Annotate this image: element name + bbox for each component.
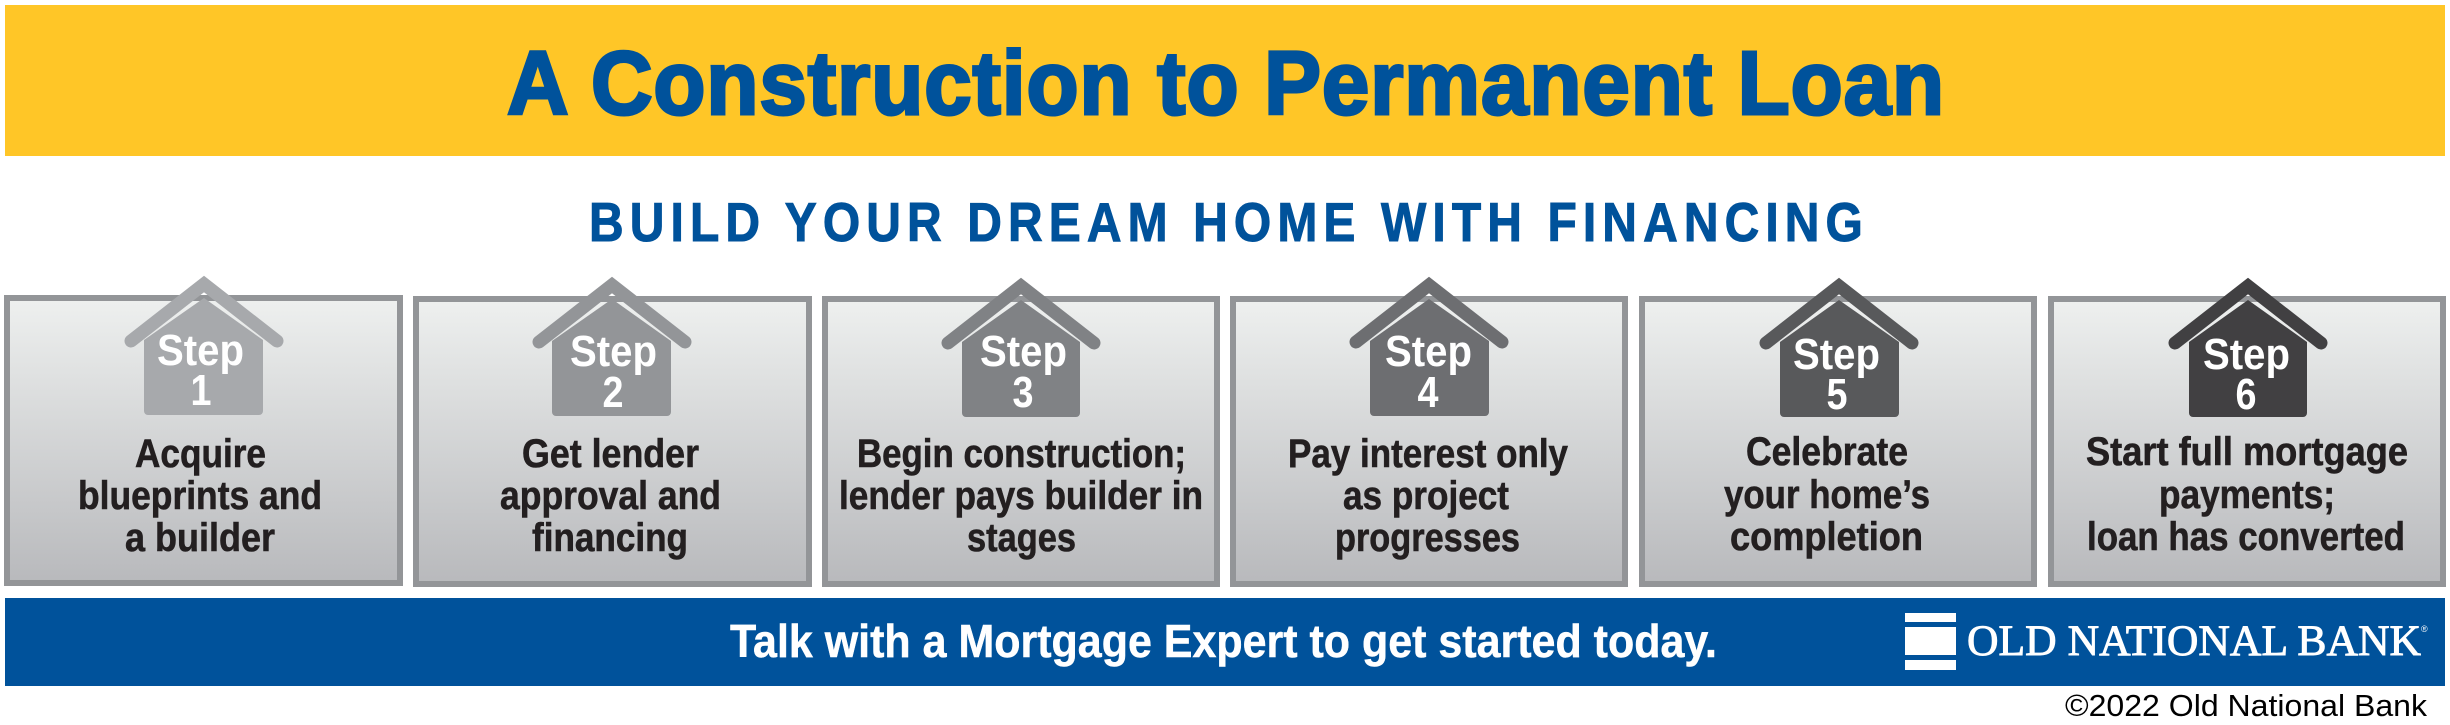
- call to action bar: [5, 598, 2445, 686]
- subtitle: BUILD YOUR DREAM HOME WITH FINANCING: [589, 191, 1869, 253]
- step 6 text: payments;: [2159, 473, 2335, 517]
- icon: house step 3: 3: [1012, 368, 1034, 417]
- icon: house step 5: [1766, 286, 1912, 419]
- icon: house step 1: [131, 284, 277, 415]
- icon: house step 5: Step: [1793, 330, 1880, 379]
- icon: house step 5: 5: [1826, 370, 1848, 419]
- panel: step 4: [1233, 285, 1625, 584]
- icon: house step 3: Step: [980, 327, 1067, 376]
- step 5 text: [1724, 430, 1930, 559]
- step 5 text: completion: [1730, 515, 1923, 559]
- step 1 text: a builder: [125, 516, 275, 560]
- step 3 text: stages: [967, 516, 1076, 560]
- step 4 text: Pay interest only: [1288, 432, 1569, 476]
- step 6 text: loan has converted: [2087, 515, 2405, 559]
- panel: step 3: [825, 286, 1217, 584]
- icon: house step 3: [948, 286, 1094, 417]
- icon: house step 2: Step: [570, 327, 657, 376]
- icon: house step 6: Step: [2203, 330, 2290, 379]
- step 2 text: approval and: [500, 474, 721, 518]
- step 2 text: Get lender: [522, 432, 699, 476]
- step 5 text: your home’s: [1724, 473, 1930, 517]
- call to action text: Talk with a Mortgage Expert to get started today.: [730, 615, 1717, 667]
- panel: step 5: [1642, 286, 2034, 584]
- step 5 text: Celebrate: [1746, 430, 1908, 474]
- step 4 text: [1288, 432, 1569, 560]
- title: A Construction to Permanent Loan: [507, 34, 1945, 134]
- copyright: ©2022 Old National Bank: [2065, 688, 2428, 723]
- icon: house step 2: [539, 285, 685, 417]
- step 1 text: [78, 432, 322, 560]
- step 3 text: lender pays builder in: [839, 474, 1203, 518]
- panel: step 1: [7, 284, 400, 583]
- icon: house step 6: [2175, 286, 2321, 419]
- title banner: [5, 5, 2445, 156]
- icon: house step 2: 2: [602, 368, 624, 417]
- step 1 text: blueprints and: [78, 474, 322, 518]
- icon: house step 4: [1356, 285, 1502, 417]
- step 1 text: Acquire: [135, 432, 266, 476]
- icon: house step 4: Step: [1385, 327, 1472, 376]
- step 3 text: Begin construction;: [857, 432, 1186, 476]
- step 2 text: [500, 432, 721, 560]
- step 4 text: progresses: [1335, 516, 1520, 560]
- logo: Old National Bank: OLD NATIONAL BANK: [1967, 618, 2421, 665]
- logo: Old National Bank: ®: [2421, 624, 2428, 634]
- icon: house step 1: 1: [190, 366, 212, 415]
- step 2 text: financing: [532, 516, 688, 560]
- icon: house step 4: 4: [1418, 368, 1439, 417]
- step 3 text: [839, 432, 1203, 560]
- step 6 text: [2086, 430, 2408, 559]
- step 4 text: as project: [1343, 474, 1509, 518]
- panel: step 6: [2051, 286, 2443, 584]
- icon: house step 1: Step: [157, 326, 244, 375]
- step 6 text: Start full mortgage: [2086, 430, 2408, 474]
- icon: house step 6: 6: [2236, 370, 2256, 419]
- panel: step 2: [416, 285, 809, 584]
